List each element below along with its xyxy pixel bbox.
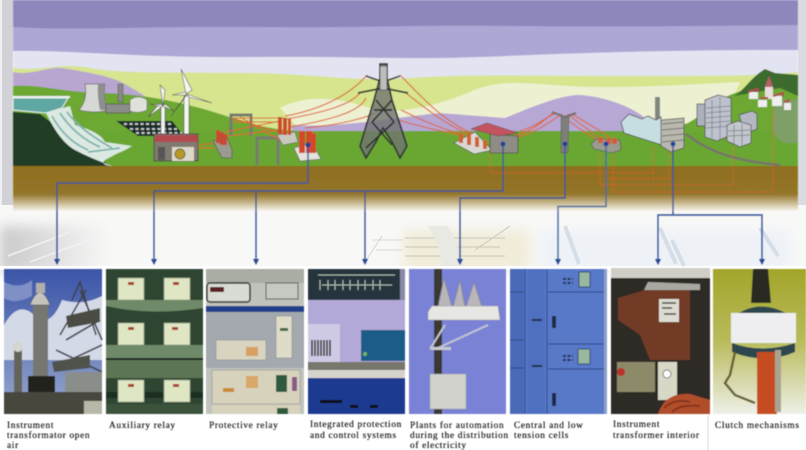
- small transformer station: [591, 137, 621, 153]
- city buildings: [697, 95, 757, 147]
- caption: plants for automation: Plants for automation: [410, 421, 504, 431]
- cooling tower and plant: [79, 84, 147, 113]
- photo: central and low tension cells: [510, 269, 607, 414]
- hydro dam and waterfall: [13, 97, 132, 166]
- distant hills: [13, 66, 798, 150]
- ground band: [13, 166, 798, 211]
- caption: integrated protection: Integrated protection: [310, 420, 402, 430]
- road: [686, 134, 780, 165]
- sky bands: [13, 0, 798, 95]
- caption: protective relay: Protective relay: [209, 421, 278, 431]
- caption: integrated protection: and control systems: [310, 431, 397, 441]
- wind turbines: [148, 69, 212, 136]
- caption: instrument transformator open air: Instrument: [7, 421, 54, 431]
- caption: clutch mechanisms: Clutch mechanisms: [715, 421, 800, 431]
- photo: clutch mechanisms: [713, 269, 806, 414]
- dotted orange underground lines: [490, 110, 773, 192]
- utility pole: [552, 112, 576, 153]
- village on hill: [734, 69, 798, 110]
- lattice pylon: [358, 64, 408, 158]
- page edge background: [0, 0, 806, 272]
- caption: central and low tension cells: Central and low: [514, 421, 584, 431]
- photo: integrated protection and control: [308, 269, 405, 414]
- blue connector lines with arrows: [57, 145, 762, 260]
- switching station building: [454, 123, 518, 154]
- factory: [621, 97, 684, 152]
- caption: instrument transformer interior: Instrument: [613, 420, 660, 430]
- caption: auxiliary relay: Auxiliary relay: [109, 421, 176, 431]
- caption: central and low tension cells: tension cells: [514, 431, 569, 441]
- arrowheads: [54, 259, 765, 265]
- red transformers: [277, 117, 321, 161]
- photo: instrument transformer interior: [611, 268, 710, 414]
- photo: instrument transformer open air: [4, 269, 102, 414]
- green land: [13, 85, 798, 166]
- photo: protective relay: [206, 269, 304, 414]
- caption: instrument transformer interior: transformer interior: [613, 430, 700, 441]
- caption: instrument transformator open air: transformator open: [7, 430, 90, 441]
- photo: automation plant: [409, 269, 506, 414]
- substation insulators: [198, 130, 232, 158]
- photo: auxiliary relay: [106, 269, 203, 414]
- orange conductors: [225, 75, 610, 141]
- generator building: [154, 134, 198, 161]
- gantry frames: [231, 115, 278, 165]
- caption: plants for automation: during the distribution: [410, 431, 509, 441]
- solar panels: [116, 121, 184, 136]
